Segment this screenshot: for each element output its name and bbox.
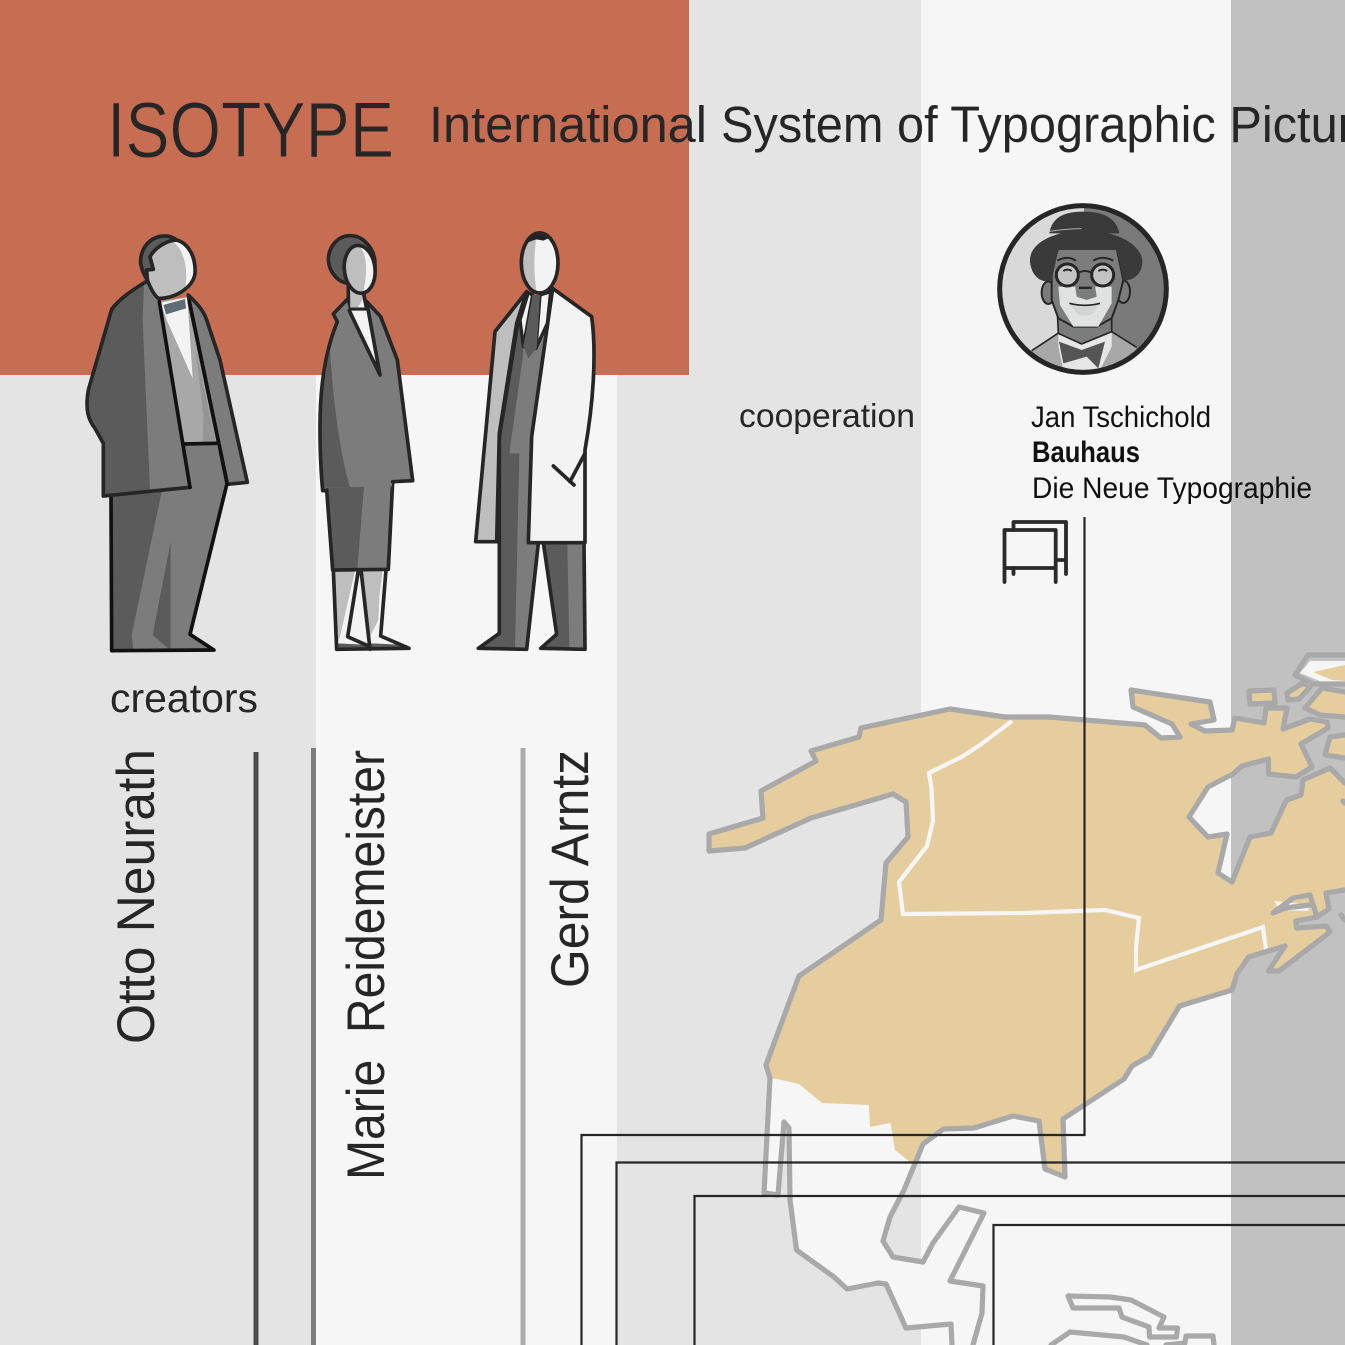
name: Gerd Arntz: Gerd Arntz [541, 750, 600, 988]
red header panel [0, 0, 689, 375]
right trouser leg [541, 543, 585, 649]
text block: Jan Tschichold: Jan Tschichold [1031, 401, 1211, 434]
white coat [528, 288, 594, 543]
title: ISOTYPE: ISOTYPE [107, 85, 394, 174]
coastline outline [709, 655, 1345, 1345]
label: creators: creators [110, 675, 258, 721]
skirt [327, 482, 393, 570]
jacket right side [188, 295, 247, 484]
icon: stacked frames [1004, 522, 1066, 582]
hair [328, 236, 375, 283]
creator rule: Arntz [520, 748, 526, 1345]
legs [333, 570, 409, 649]
map of North America [709, 655, 1345, 1345]
text block: Jan Tschichold [1031, 401, 1312, 505]
face [147, 240, 195, 298]
figure: Gerd Arntz [476, 233, 594, 649]
text block: Jan Tschichold: Bauhaus [1032, 436, 1140, 469]
figure: Otto Neurath [87, 236, 247, 651]
figure: Marie Reidemeister [320, 236, 413, 649]
name: Otto Neurath: Otto Neurath [107, 749, 166, 1044]
subtitle: International [429, 96, 707, 153]
jacket [320, 300, 413, 491]
creator rule: Neurath [254, 752, 258, 1345]
suit [478, 293, 550, 649]
hair [141, 236, 177, 280]
creator rule: Reidemeister [311, 748, 316, 1345]
small white sliver in the Gulf of St Lawrence [1274, 901, 1310, 911]
tan land area [709, 690, 1345, 1177]
connector lines [582, 517, 1345, 1345]
head [521, 233, 558, 293]
trousers [111, 444, 227, 651]
subtitle [429, 96, 1345, 153]
collar and tie [520, 292, 551, 358]
neck [348, 282, 367, 309]
tan and white arctic islands [1250, 661, 1345, 758]
waistcoat and shirt [158, 297, 218, 444]
state borders [899, 721, 1266, 970]
jacket left side [87, 282, 190, 496]
far side of coat [476, 292, 527, 542]
name: Marie Reidemeister: Marie Reidemeister [337, 750, 396, 1180]
label: cooperation: cooperation [739, 397, 915, 434]
face [342, 244, 377, 295]
Mexico and Central America fill [764, 1078, 984, 1345]
text block: Jan Tschichold: Die Neue Typographie [1032, 472, 1312, 505]
portrait: Jan Tschichold [997, 203, 1171, 377]
